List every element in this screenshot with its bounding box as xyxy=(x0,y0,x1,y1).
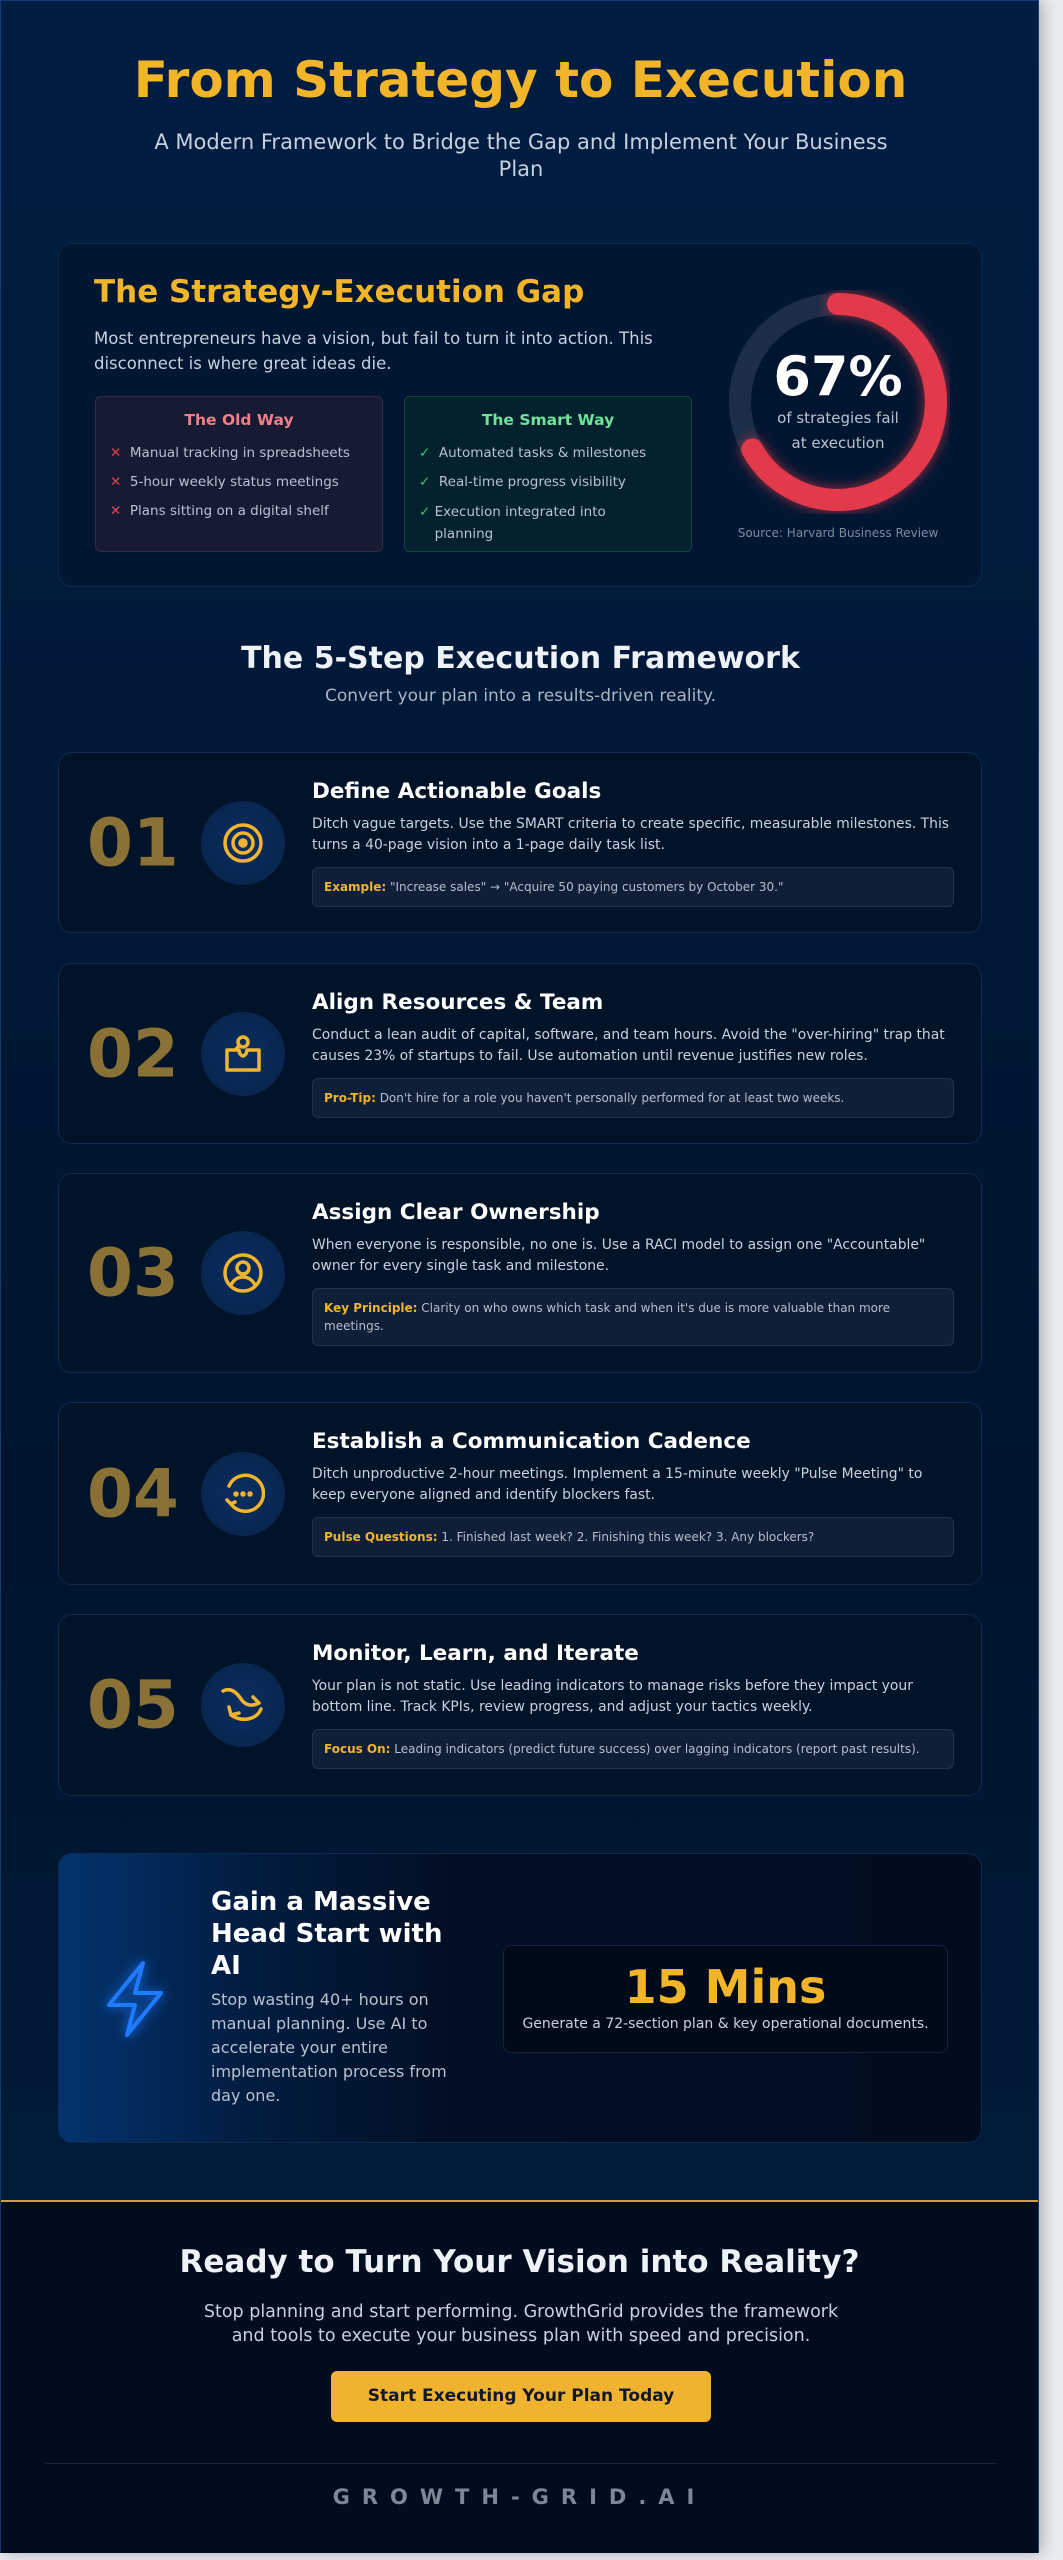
step 05: Your plan is not static. Use leading indicators to manage risks before they impact your bottom line. Track KPIs, review progress, and adjust your tactics weekly. xyxy=(312,1678,913,1715)
source: Source: Harvard Business Review xyxy=(738,526,938,540)
button xyxy=(331,2371,711,2422)
step 05 xyxy=(58,1614,982,1796)
icon: iterate arrows xyxy=(201,1663,285,1747)
subtitle: framework: Convert your plan into a results-driven reality. xyxy=(325,686,716,706)
box: smart way: ✓ xyxy=(419,504,430,520)
step 02: 02 xyxy=(87,1015,179,1092)
text: gap description: Most entrepreneurs have a vision, but fail to turn it into action. This disconnect is where great ideas die. xyxy=(94,329,653,373)
step 01 xyxy=(58,752,982,933)
step 03 xyxy=(58,1173,982,1373)
panel: strategy-execution gap xyxy=(58,243,982,587)
step 04: 04 xyxy=(87,1455,179,1532)
icon: resources box xyxy=(201,1012,285,1096)
box: old way: ✕ Manual tracking in spreadsheets xyxy=(110,445,350,461)
box: old way: The Old Way xyxy=(184,411,294,429)
step 05: Focus On: Leading indicators (predict future success) over lagging indicators (report past results). xyxy=(324,1742,920,1756)
chart: 67% donut xyxy=(729,290,950,514)
callout: 15 mins: 15 Mins xyxy=(625,1960,826,2014)
footer CTA section xyxy=(1,2200,1038,2553)
box: smart way: Execution integrated into planning xyxy=(435,504,606,542)
heading: framework: The 5-Step Execution Framework xyxy=(241,641,800,676)
button: Start Executing Your Plan Today xyxy=(368,2386,674,2406)
box: smart way: The Smart Way xyxy=(482,411,614,429)
step 01: Define Actionable Goals xyxy=(312,779,601,804)
callout: 15 mins xyxy=(503,1945,948,2053)
box: old way: ✕ 5-hour weekly status meetings xyxy=(110,474,339,490)
title: From Strategy to Execution xyxy=(134,51,907,109)
icon: chat xyxy=(201,1452,285,1536)
step 03: Assign Clear Ownership xyxy=(312,1200,600,1225)
step 01: 01 xyxy=(87,804,179,881)
icon: target xyxy=(201,800,285,884)
panel: AI head start xyxy=(58,1853,982,2143)
subtitle: A Modern Framework to Bridge the Gap and Implement Your Business Plan xyxy=(154,130,888,181)
heading: AI: Gain a Massive Head Start with AI xyxy=(211,1887,442,1981)
step 02: Pro-Tip: Don't hire for a role you haven't personally performed for at least two weeks. xyxy=(324,1091,844,1105)
brand: GROWTH-GRID.AI xyxy=(333,2485,706,2509)
step 02 xyxy=(58,963,982,1144)
step 01: Example: "Increase sales" → "Acquire 50 paying customers by October 30." xyxy=(324,880,784,894)
step 04: Establish a Communication Cadence xyxy=(312,1429,751,1454)
box: smart way: ✓ Real-time progress visibility xyxy=(419,474,626,490)
icon: user xyxy=(201,1231,285,1315)
step 01: Ditch vague targets. Use the SMART criteria to create specific, measurable milestones. This turns a 40-page vision into a 1-page daily task list. xyxy=(312,816,949,853)
chart: 67% donut: of strategies fail xyxy=(777,409,899,427)
step 04: Pulse Questions: 1. Finished last week? 2. Finishing this week? 3. Any blockers? xyxy=(324,1530,814,1544)
heading: gap: The Strategy-Execution Gap xyxy=(94,274,584,310)
step 05: 05 xyxy=(87,1666,179,1744)
heading: CTA: Ready to Turn Your Vision into Reality? xyxy=(180,2244,859,2280)
step 04 xyxy=(58,1402,982,1585)
chart: 67% donut: at execution xyxy=(792,434,884,452)
step 03: Key Principle: Clarity on who owns which task and when it's due is more valuable than more meetings. xyxy=(324,1301,890,1333)
step 02: Align Resources & Team xyxy=(312,990,603,1015)
step 03: When everyone is responsible, no one is. Use a RACI model to assign one "Accountable" owner for every single task and milestone. xyxy=(312,1237,925,1274)
text: CTA: Stop planning and start performing. GrowthGrid provides the framework and tools to execute your business plan with speed and precision. xyxy=(204,2302,838,2346)
box: old way xyxy=(95,396,383,552)
callout: 15 mins: Generate a 72-section plan & key operational documents. xyxy=(522,2016,929,2032)
step 05: Monitor, Learn, and Iterate xyxy=(312,1641,639,1666)
box: smart way: ✓ Automated tasks & milestones xyxy=(419,445,646,461)
step 02: Conduct a lean audit of capital, software, and team hours. Avoid the "over-hiring" trap that causes 23% of startups to fail. Use automation until revenue justifies new roles. xyxy=(312,1027,945,1064)
text: AI description: Stop wasting 40+ hours on manual planning. Use AI to accelerate your entire implementation process from day one. xyxy=(211,1990,447,2105)
box: smart way xyxy=(404,396,692,552)
step 04: Ditch unproductive 2-hour meetings. Implement a 15-minute weekly "Pulse Meeting" to keep everyone aligned and identify blockers fast. xyxy=(312,1466,922,1503)
chart: 67% donut: 67% xyxy=(773,345,903,408)
step 03: 03 xyxy=(87,1234,179,1312)
box: old way: ✕ Plans sitting on a digital shelf xyxy=(110,503,329,519)
icon: lightning xyxy=(101,1956,169,2042)
